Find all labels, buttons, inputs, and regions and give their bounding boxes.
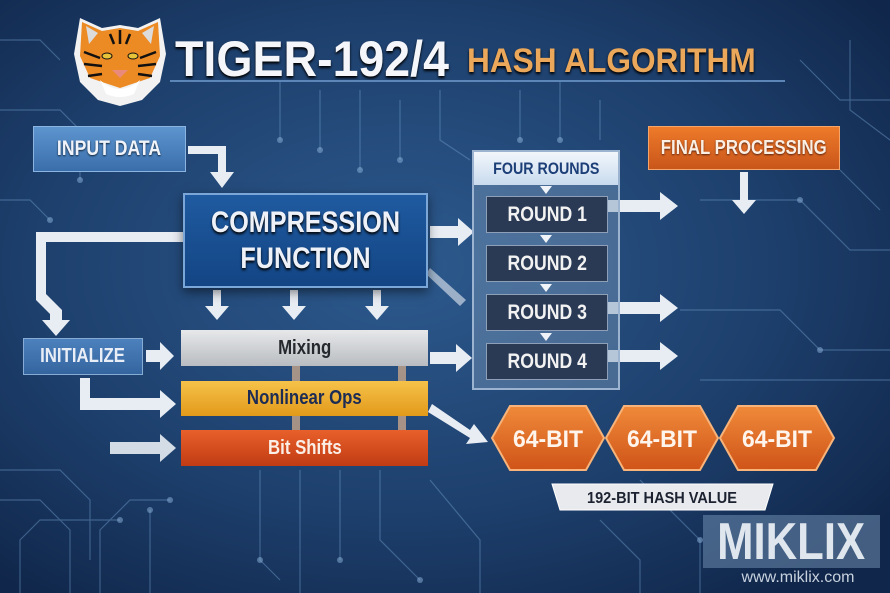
round 3 — [486, 294, 608, 331]
hex 2 — [606, 406, 718, 470]
hex 1 — [492, 406, 604, 470]
box: input data — [33, 126, 186, 172]
round 4: ROUND 4 — [507, 350, 587, 372]
box: compression function: FUNCTION — [240, 242, 371, 274]
panel: four rounds — [472, 150, 620, 390]
arrow: loop to initialize — [36, 232, 183, 336]
arrow: compression to round3 diag — [426, 268, 466, 306]
box: initialize — [23, 338, 143, 375]
text: website url: www.miklix.com — [742, 569, 854, 586]
title — [174, 31, 756, 87]
round 2 — [486, 245, 608, 282]
box: bit shifts: Bit Shifts — [268, 436, 341, 458]
title: HASH ALGORITHM — [467, 42, 756, 80]
label: 192-bit hash value: 192-BIT HASH VALUE — [587, 490, 737, 507]
box: input data: INPUT DATA — [57, 137, 162, 160]
title: TIGER-192/4 — [175, 31, 449, 87]
box: nonlinear ops — [181, 381, 428, 416]
arrow: input to compression — [188, 146, 234, 188]
panel header: FOUR ROUNDS — [493, 158, 599, 178]
label: 192-bit hash value — [551, 484, 774, 510]
small arrows between rounds — [540, 186, 552, 341]
arrow: round4 right — [608, 342, 678, 370]
hex 2: 64-BIT — [627, 426, 697, 453]
arrow: mixing to round4 — [430, 344, 472, 372]
hexagons: 64-bit blocks — [490, 405, 836, 471]
arrow: final processing down — [732, 172, 756, 214]
icon: tiger head — [74, 18, 166, 106]
box: mixing: Mixing — [278, 336, 331, 358]
arrow: compression down arrows — [205, 290, 389, 320]
round 2: ROUND 2 — [507, 252, 587, 274]
arrow: compression to rounds — [430, 218, 474, 246]
hex 1: 64-BIT — [513, 426, 583, 453]
hex 3 — [720, 406, 834, 470]
arrow: round3 right — [608, 294, 678, 322]
round 1 — [486, 196, 608, 233]
arrow: nonlinear to hexes — [428, 404, 488, 444]
round 3: ROUND 3 — [507, 300, 587, 324]
arrow: to bit shifts — [110, 434, 176, 462]
box: nonlinear ops: Nonlinear Ops — [247, 387, 362, 409]
round 1: ROUND 1 — [507, 202, 587, 226]
round 4 — [486, 343, 608, 380]
arrow: initialize to mixing — [146, 342, 174, 370]
box: compression function — [183, 193, 428, 288]
panel header — [474, 152, 618, 185]
box: final processing: FINAL PROCESSING — [661, 136, 827, 158]
hex 3: 64-BIT — [742, 426, 812, 453]
arrow: init to nonlinear — [80, 378, 176, 418]
box: initialize: INITIALIZE — [41, 345, 125, 367]
arrow: round1 right — [608, 192, 678, 220]
box: mixing — [181, 330, 428, 366]
box: final processing — [648, 126, 840, 170]
logo: miklix: MIKLIX — [717, 512, 866, 570]
box: compression function: COMPRESSION — [211, 206, 400, 238]
mixing connectors — [292, 366, 300, 430]
box: bit shifts — [181, 430, 428, 466]
